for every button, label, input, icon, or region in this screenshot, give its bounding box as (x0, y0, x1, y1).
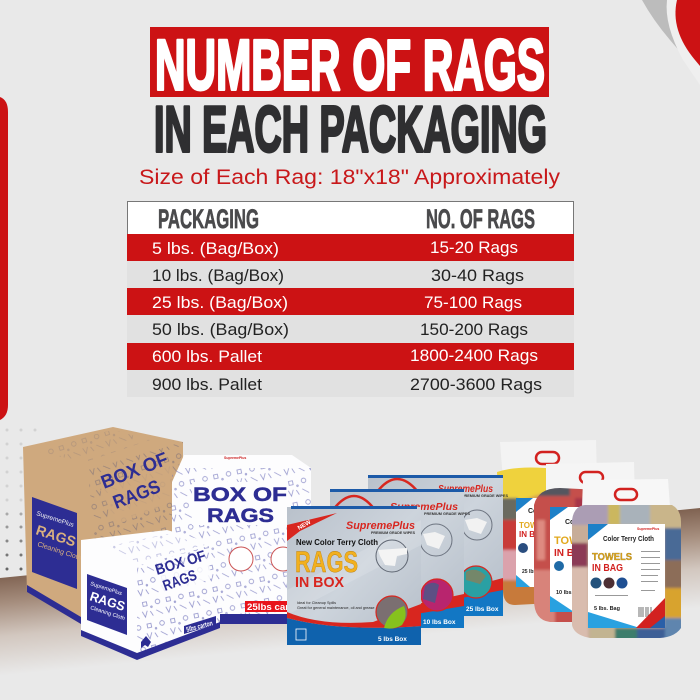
in box heading: IN BOX (295, 574, 344, 591)
bag label: Co (528, 508, 537, 515)
bag label: IN B (519, 530, 535, 539)
row: 10 lbs (127, 261, 574, 288)
row: 10 lbs: 30-40 Rags (431, 267, 524, 285)
bag label: 5 lbs. Bag (594, 606, 620, 612)
row: 600 lbs (127, 343, 574, 370)
bag label: IN BAG (592, 563, 623, 574)
row: 900 lbs: 900 lbs. Pallet (152, 376, 262, 394)
icon: logo (296, 629, 306, 640)
brand line: SupremePlus (224, 456, 246, 460)
table header (128, 202, 574, 234)
bag label: Color Terry Cloth (603, 536, 654, 543)
bottom band (287, 604, 421, 645)
25lbs label: 25lbs car (247, 602, 290, 612)
title line 1 red banner (150, 27, 549, 97)
row: 5 lbs: 15-20 Rags (430, 239, 518, 257)
bag label (516, 498, 566, 587)
usage text: Great for general maintenance, oil and grease (297, 606, 374, 610)
row: 25 lbs: 25 lbs. (Bag/Box) (152, 294, 288, 312)
brand: PREMIUM GRADE WIPES (371, 530, 415, 535)
bag label: IN B (554, 548, 574, 559)
box of rags lettering: BOX OF (98, 449, 171, 494)
bag label: TOWELS (592, 551, 632, 563)
new ribbon (287, 513, 337, 541)
blue side panel: Cleaning Cloth (36, 541, 82, 562)
bag label: TOW (519, 521, 538, 530)
blue side panel (87, 574, 127, 635)
row: 50 lbs (127, 315, 574, 343)
blue side panel: RAGS (88, 589, 127, 614)
bag label: Co (565, 519, 574, 526)
box: 25 lbs rags: 25 lbs Box (466, 606, 499, 613)
row: 900 lbs (127, 370, 574, 397)
box: 25 lbs rags: SupremePlus (438, 484, 493, 495)
row: 10 lbs: 10 lbs. (Bag/Box) (152, 267, 284, 285)
table header: NO. OF RAGS (426, 204, 535, 234)
row: 50 lbs: 150-200 Rags (420, 321, 528, 339)
blue side panel: SupremePlus (35, 510, 75, 529)
dot pattern (6, 428, 36, 570)
usage text (297, 601, 374, 610)
row: 600 lbs: 600 lbs. Pallet (152, 348, 262, 366)
row: 25 lbs (127, 288, 574, 315)
blue side panel: SupremePlus (89, 581, 123, 597)
box of rags lettering: RAGS (110, 477, 164, 514)
box of rags lettering: RAGS (161, 567, 199, 595)
left red tab (0, 97, 8, 420)
row: 25 lbs: 75-100 Rags (424, 294, 522, 312)
box of rags lettering: BOX OF (153, 547, 208, 579)
box: 10 lbs rags: SupremePlus (390, 502, 458, 513)
bag label (588, 524, 665, 628)
bag: 25 lbs (497, 440, 596, 605)
handle (377, 479, 418, 492)
bag: 5 lbs (572, 479, 681, 638)
box: 10 lbs rags: PREMIUM GRADE WIPES (424, 512, 470, 516)
row: 900 lbs: 2700-3600 Rags (410, 376, 542, 394)
bag label: TOW (554, 535, 580, 547)
row: 50 lbs: 50 lbs. (Bag/Box) (152, 321, 289, 339)
box of rags lettering: BOX OF (193, 484, 287, 506)
box of rags lettering: RAGS (207, 505, 274, 527)
blue side panel: RAGS (34, 522, 78, 550)
box of rags lettering (98, 449, 176, 524)
size label: 5 lbs Box (378, 636, 407, 643)
diagonal sheen (287, 520, 421, 615)
title (150, 26, 549, 166)
icon: recycle (141, 636, 151, 648)
bag label: 10 lbs (556, 590, 572, 596)
new ribbon: NEW (297, 519, 312, 532)
5lbs label: 5lbs carton (186, 620, 214, 634)
usage text: Ideal for Cleanup Spills (297, 601, 336, 605)
bag label: 25 lbs (522, 569, 536, 575)
blue side panel (32, 497, 82, 589)
wood floor (0, 508, 700, 690)
box: 5 lbs white box (81, 530, 220, 660)
row: 5 lbs (127, 234, 574, 261)
subtitle: Size of Each Rag: 18"x18" Approximately (139, 165, 560, 189)
bag label (550, 507, 600, 612)
table header: PACKAGING (158, 204, 259, 234)
box: 25 lbs white box (172, 455, 311, 624)
brand: SupremePlus (346, 520, 415, 532)
box of rags lettering (193, 484, 287, 527)
box: 10 lbs rags (330, 479, 470, 628)
row: 600 lbs: 1800-2400 Rags (410, 347, 538, 365)
row: 5 lbs: 5 lbs. (Bag/Box) (152, 240, 279, 258)
handle (333, 496, 375, 510)
rag photo circle (376, 596, 408, 629)
box: 5 lbs rags (287, 496, 421, 645)
hand circle icon (376, 540, 408, 572)
product title: New Color Terry Cloth (296, 537, 378, 547)
swoosh: top right corner (642, 0, 700, 85)
rags heading: RAGS (295, 546, 358, 579)
box: 25 lbs rags: PREMIUM GRADE WIPES (462, 494, 508, 498)
box: kraft large box (23, 427, 183, 624)
bag: 10 lbs (534, 462, 634, 622)
usage circles (229, 547, 253, 571)
box of rags lettering (153, 547, 212, 596)
box: 25 lbs rags (368, 475, 508, 616)
table (127, 202, 574, 397)
box: 10 lbs rags: 10 lbs Box (423, 619, 456, 626)
blue side panel: Cleaning Cloth (89, 605, 126, 622)
bag label: SupremePlus (637, 527, 659, 531)
